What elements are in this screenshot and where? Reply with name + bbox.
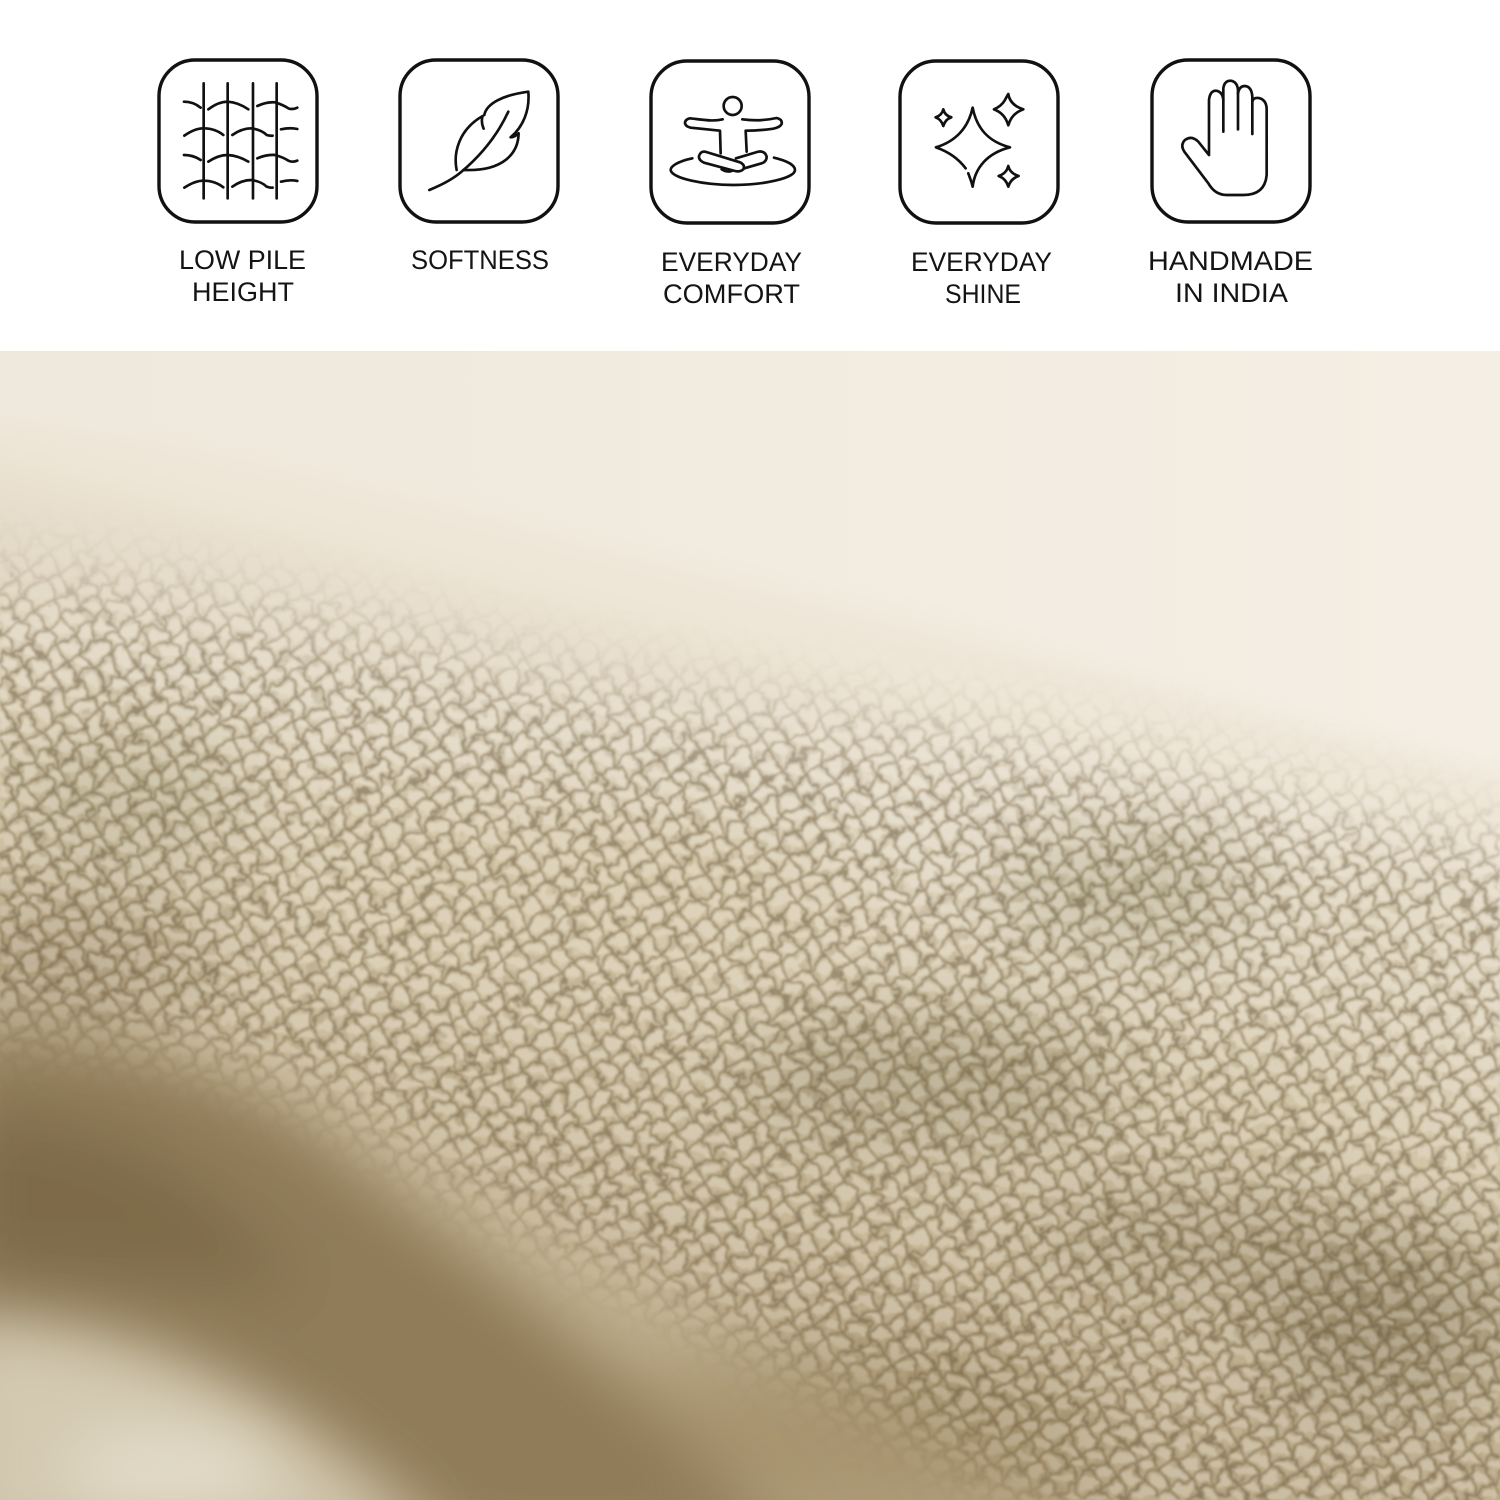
icon: everyday shine sparkles bbox=[900, 61, 1058, 223]
photo: close-up of rug pile bbox=[0, 351, 1500, 1500]
blurred background behind rug bbox=[0, 351, 1500, 1500]
label: everyday shine bbox=[911, 247, 1052, 309]
label: handmade in india: HANDMADE bbox=[1148, 246, 1313, 276]
label: everyday comfort: EVERYDAY bbox=[661, 247, 802, 277]
label: softness: SOFTNESS bbox=[411, 245, 549, 275]
icon: handmade hand bbox=[1152, 60, 1310, 222]
label: low pile height: HEIGHT bbox=[192, 277, 294, 307]
label: handmade in india: IN INDIA bbox=[1175, 278, 1288, 308]
label: handmade in india bbox=[1148, 246, 1313, 308]
pale blurred foreground lower left bbox=[0, 1320, 420, 1500]
icon: everyday comfort meditating figure bbox=[651, 61, 809, 223]
label: low pile height: LOW PILE bbox=[179, 245, 306, 275]
page background bbox=[0, 0, 1500, 351]
icon: softness feather bbox=[400, 60, 558, 222]
shadow band lower left bbox=[0, 1030, 790, 1500]
label: everyday comfort: COMFORT bbox=[663, 279, 800, 309]
label: everyday shine: SHINE bbox=[945, 279, 1021, 309]
label: everyday shine: EVERYDAY bbox=[911, 247, 1052, 277]
icon: low pile height bbox=[159, 60, 317, 222]
label: low pile height bbox=[179, 245, 306, 307]
label: everyday comfort bbox=[661, 247, 802, 309]
pile texture overlay bbox=[0, 550, 1500, 1500]
